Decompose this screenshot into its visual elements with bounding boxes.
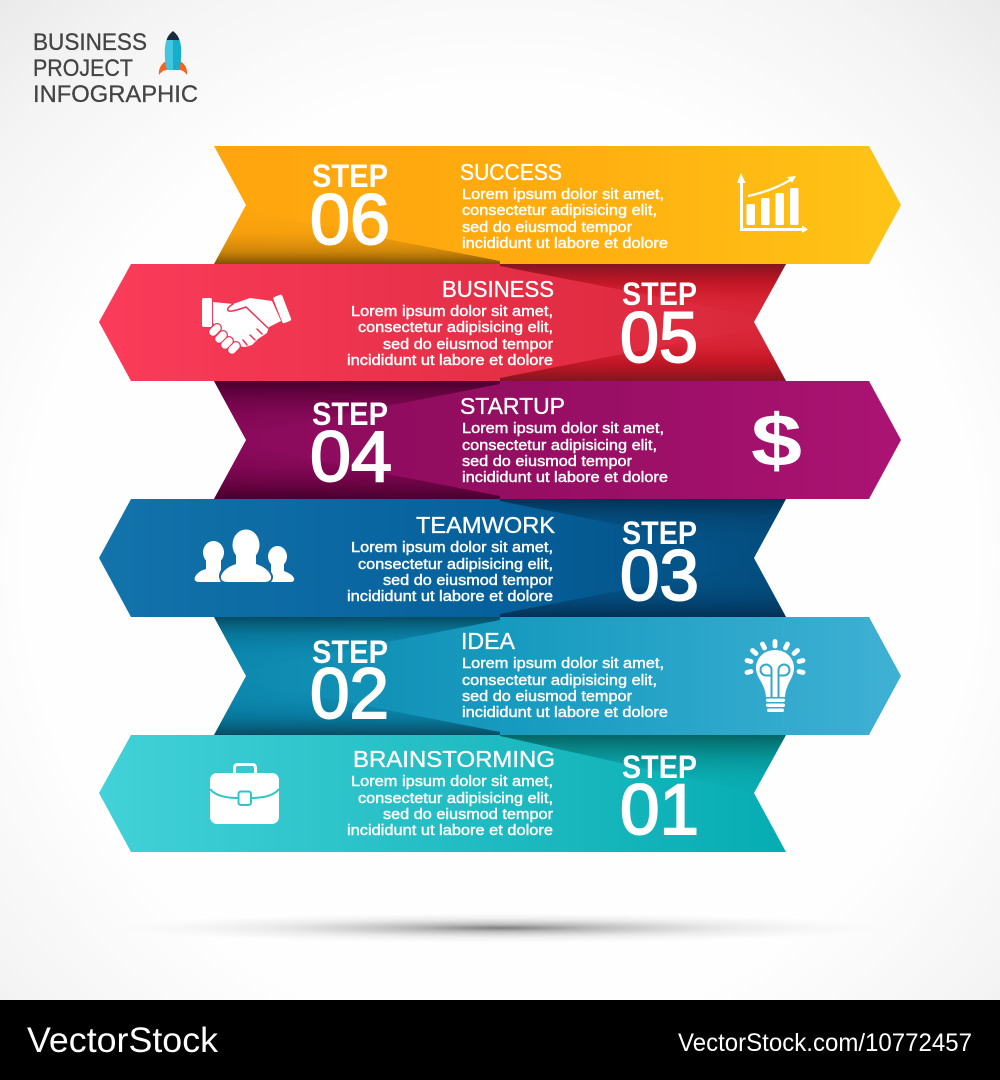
logo text: INFOGRAPHIC <box>33 81 198 108</box>
logo <box>33 29 198 108</box>
text: startup: STARTUP <box>460 393 565 419</box>
text: teamwork: consectetur adipisicing elit, <box>358 556 553 573</box>
panel: step 04 startup <box>214 381 901 499</box>
icon: handshake <box>202 294 292 350</box>
text: idea: incididunt ut labore et dolore <box>462 704 668 721</box>
watermark logo: VectorStock <box>27 1021 219 1060</box>
text: business: consectetur adipisicing elit, <box>358 319 553 336</box>
step number 01: STEP <box>622 749 697 785</box>
text: idea: Lorem ipsum dolor sit amet, <box>462 655 664 672</box>
text: idea: consectetur adipisicing elit, <box>462 672 657 689</box>
text: brainstorming: consectetur adipisicing elit, <box>358 790 553 807</box>
text: teamwork: Lorem ipsum dolor sit amet, <box>351 539 553 556</box>
panel: step 03 teamwork <box>99 499 786 617</box>
text: brainstorming: sed do eiusmod tempor <box>383 806 553 823</box>
text: idea <box>461 628 668 721</box>
text: teamwork <box>347 512 555 605</box>
text: brainstorming: incididunt ut labore et dolore <box>347 822 553 839</box>
icon: light bulb <box>747 642 803 712</box>
text: startup: Lorem ipsum dolor sit amet, <box>462 420 664 437</box>
text: startup: consectetur adipisicing elit, <box>462 437 657 454</box>
icon: rocket <box>159 31 187 75</box>
step number 06: 06 <box>310 181 390 260</box>
text: business <box>347 276 554 369</box>
step number 04: STEP <box>312 396 388 432</box>
text: idea: sed do eiusmod tempor <box>462 688 632 705</box>
watermark bar <box>0 1000 1000 1080</box>
step number 05: 05 <box>620 299 698 378</box>
logo text: BUSINESS <box>33 29 147 56</box>
step number 01: 01 <box>620 771 699 850</box>
text: idea: IDEA <box>461 628 515 654</box>
logo text: PROJECT <box>33 55 133 82</box>
panel: step 06 success <box>214 146 901 264</box>
panel: step 05 business <box>99 264 786 381</box>
text: teamwork: incididunt ut labore et dolore <box>347 588 553 605</box>
text: brainstorming <box>347 746 555 839</box>
step number 06: STEP <box>312 158 388 194</box>
text: business: incididunt ut labore et dolore <box>347 352 553 369</box>
text: teamwork: sed do eiusmod tempor <box>383 572 553 589</box>
text: success: Lorem ipsum dolor sit amet, <box>462 186 664 203</box>
step number 03: 03 <box>620 537 699 616</box>
text: startup: sed do eiusmod tempor <box>462 453 632 470</box>
text: startup <box>460 393 668 486</box>
icon: team <box>195 530 294 582</box>
step number 02: 02 <box>310 655 389 734</box>
ground shadow <box>115 913 885 943</box>
step number 02: STEP <box>312 634 388 670</box>
icon: briefcase <box>210 764 279 824</box>
watermark url: VectorStock.com/10772457 <box>678 1029 972 1057</box>
panel: step 02 idea <box>214 617 901 735</box>
text: startup: incididunt ut labore et dolore <box>462 469 668 486</box>
icon: dollar: $ <box>751 399 802 482</box>
text: brainstorming: Lorem ipsum dolor sit amet, <box>351 773 553 790</box>
text: success: incididunt ut labore et dolore <box>462 235 668 252</box>
icon: growth chart <box>737 173 808 233</box>
text: success <box>460 159 668 252</box>
text: business: Lorem ipsum dolor sit amet, <box>351 303 553 320</box>
text: business: BUSINESS <box>442 276 554 302</box>
step number 03: STEP <box>622 515 697 551</box>
panel: step 01 brainstorming <box>99 735 786 852</box>
step number 04: 04 <box>310 418 392 497</box>
text: teamwork: TEAMWORK <box>416 512 555 538</box>
logo text <box>33 29 198 108</box>
text: business: sed do eiusmod tempor <box>383 336 553 353</box>
text: success: consectetur adipisicing elit, <box>462 202 657 219</box>
text: brainstorming: BRAINSTORMING <box>353 746 555 772</box>
text: success: sed do eiusmod tempor <box>462 219 632 236</box>
step number 05: STEP <box>622 276 697 312</box>
text: success: SUCCESS <box>460 159 562 185</box>
